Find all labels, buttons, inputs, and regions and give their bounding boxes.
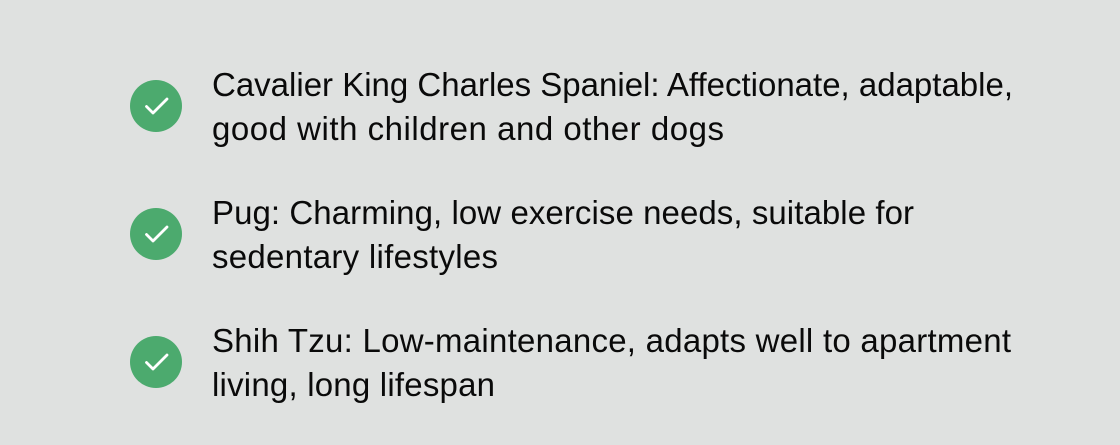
text: Pug description xyxy=(212,194,914,275)
text: Pug description: Pug: Charming, low exercise needs, suitable for xyxy=(212,194,914,231)
text: Shih Tzu description xyxy=(212,322,1011,403)
list item: Cavalier King Charles Spaniel xyxy=(130,66,1013,147)
list item: Shih Tzu xyxy=(130,322,1011,403)
text: Shih Tzu description: Shih Tzu: Low-maintenance, adapts well to apartment xyxy=(212,322,1011,359)
text: Cavalier description: good with children and other dogs xyxy=(212,110,724,147)
icon: green check circle xyxy=(130,208,182,260)
icon: green check circle xyxy=(130,336,182,388)
list item: Pug xyxy=(130,194,914,275)
text: Pug description: sedentary lifestyles xyxy=(212,238,498,275)
text: Shih Tzu description: living, long lifespan xyxy=(212,366,495,403)
icon: green check circle xyxy=(130,80,182,132)
text: Cavalier description xyxy=(212,66,1013,147)
text: Cavalier description: Cavalier King Charles Spaniel: Affectionate, adaptable, xyxy=(212,66,1013,103)
